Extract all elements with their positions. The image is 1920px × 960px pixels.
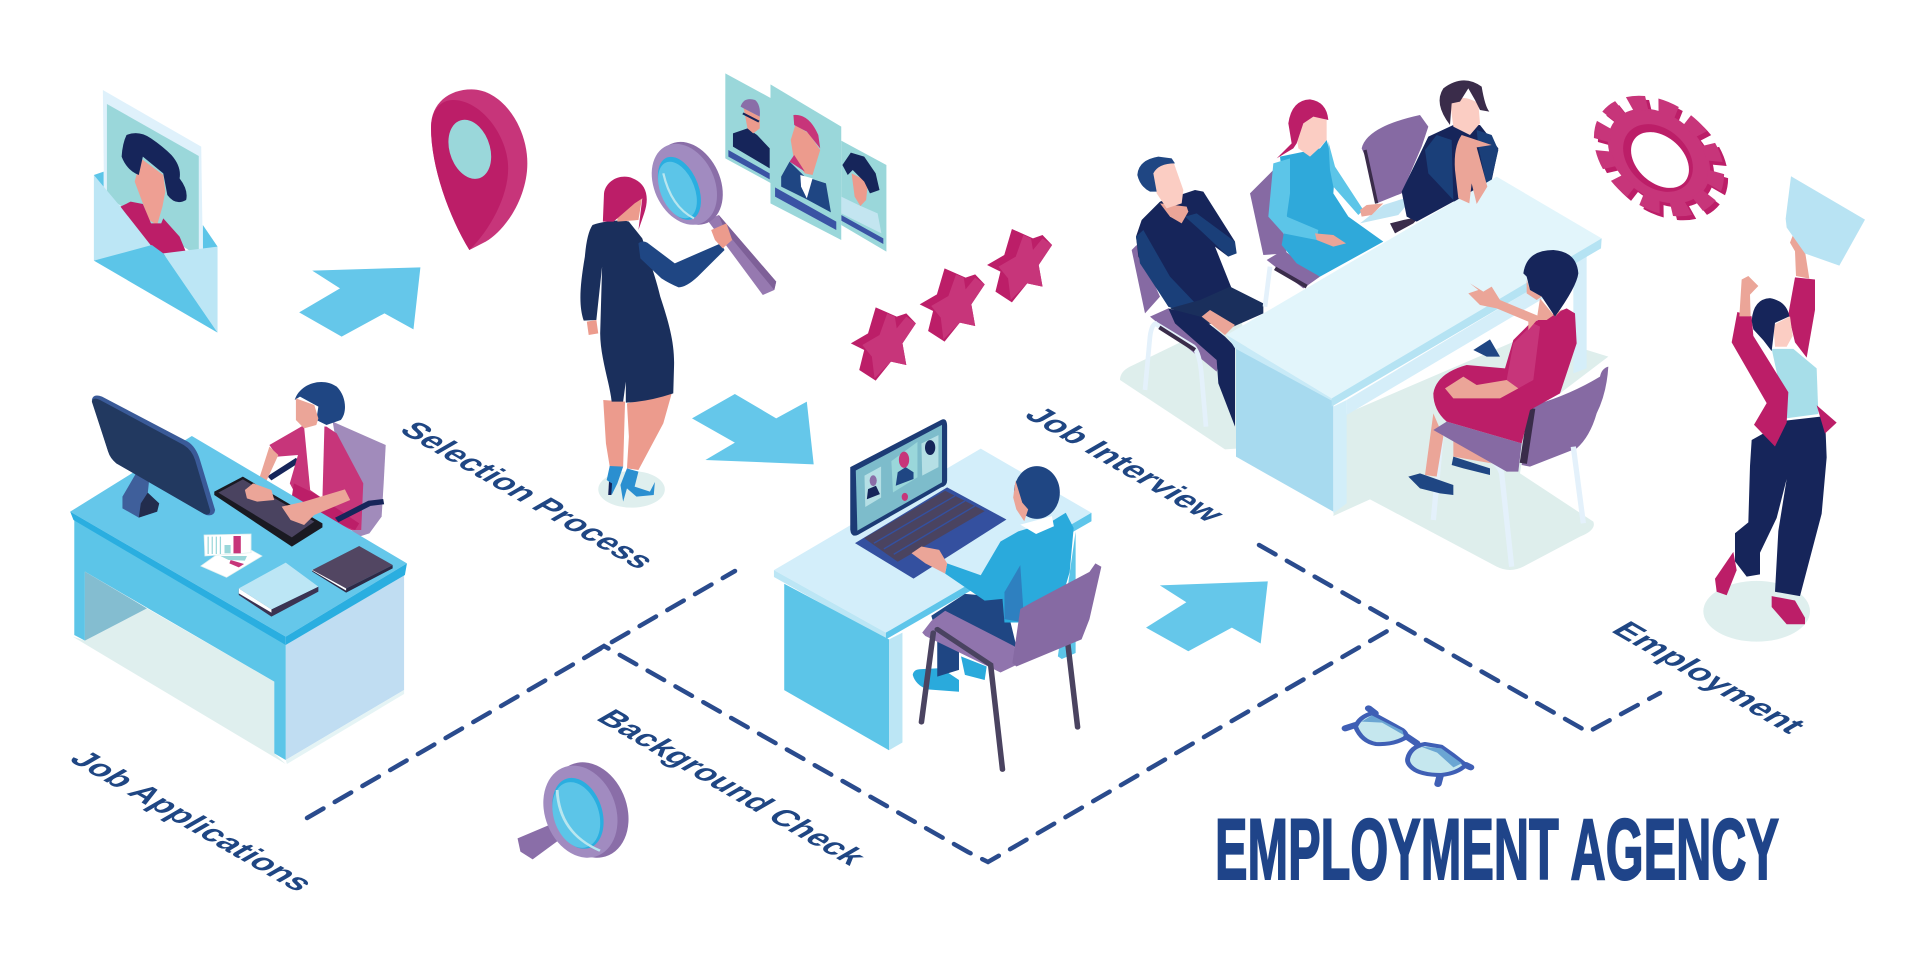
shoes — [1715, 552, 1805, 624]
illustration: job interview table — [1120, 80, 1608, 570]
illustration: recruiter with magnifier — [580, 134, 776, 508]
arms — [1739, 234, 1809, 316]
label: Employment: Employment — [1604, 616, 1815, 738]
icon: location pin — [431, 89, 527, 250]
arrow: background check to interview — [1146, 581, 1268, 651]
label: Job Applications: Job Applications — [62, 745, 323, 896]
icon: glasses — [1345, 708, 1471, 784]
star 3 — [987, 229, 1052, 302]
interviewer: man — [1132, 157, 1263, 427]
card: right candidate — [841, 141, 886, 252]
dashed process path — [307, 545, 1660, 862]
star 1 — [851, 307, 916, 381]
candidate shoe under table — [1473, 339, 1500, 357]
interviewer: woman in blue — [1250, 99, 1415, 307]
books on desk — [239, 546, 393, 617]
navy woman's arms — [1455, 135, 1492, 204]
suit — [580, 221, 674, 403]
papers on desk — [201, 534, 262, 577]
icon: envelope with CV photo — [94, 90, 218, 333]
label: Job Interview: Job Interview — [1017, 401, 1234, 527]
label: Background Check: Background Check — [589, 704, 875, 870]
icon: gear — [1581, 81, 1741, 235]
card: left candidate — [725, 73, 771, 183]
chair and seated woman — [257, 382, 386, 537]
icon: magnifier — [518, 756, 639, 864]
raised paper — [1786, 176, 1865, 266]
candidate: woman in red dress — [1408, 250, 1608, 567]
head — [1752, 298, 1793, 351]
arrow: selection to background check — [692, 394, 814, 464]
legs and shoes — [603, 393, 672, 502]
interviewer: woman in navy — [1362, 80, 1498, 233]
desk — [774, 449, 1091, 750]
candidate profile cards — [725, 73, 886, 252]
jacket — [1732, 277, 1837, 446]
seated man — [912, 466, 1074, 692]
floor shadow — [598, 471, 665, 508]
desk — [70, 436, 407, 764]
illustration: applicant at desk — [70, 382, 407, 764]
floor shadows — [1120, 313, 1608, 570]
star 2 — [920, 268, 985, 342]
trousers — [1735, 416, 1827, 596]
illustration: happy employed woman — [1703, 176, 1865, 642]
chair back legs — [1068, 643, 1078, 727]
card: centre candidate — [770, 84, 841, 240]
sleeve and hand — [638, 241, 725, 287]
label: Selection Process: Selection Process — [392, 416, 664, 574]
illustration: candidate at laptop — [774, 419, 1101, 769]
head and hair — [603, 177, 647, 230]
chair — [921, 563, 1101, 769]
magnifier — [640, 134, 776, 295]
table — [1227, 177, 1602, 513]
monitor, keyboard and hands — [92, 396, 384, 547]
arrow: envelope to selection — [299, 267, 420, 337]
floor shadow — [1703, 581, 1810, 642]
icon: three rating stars — [851, 229, 1052, 381]
laptop — [850, 419, 1006, 579]
top — [1772, 349, 1818, 418]
